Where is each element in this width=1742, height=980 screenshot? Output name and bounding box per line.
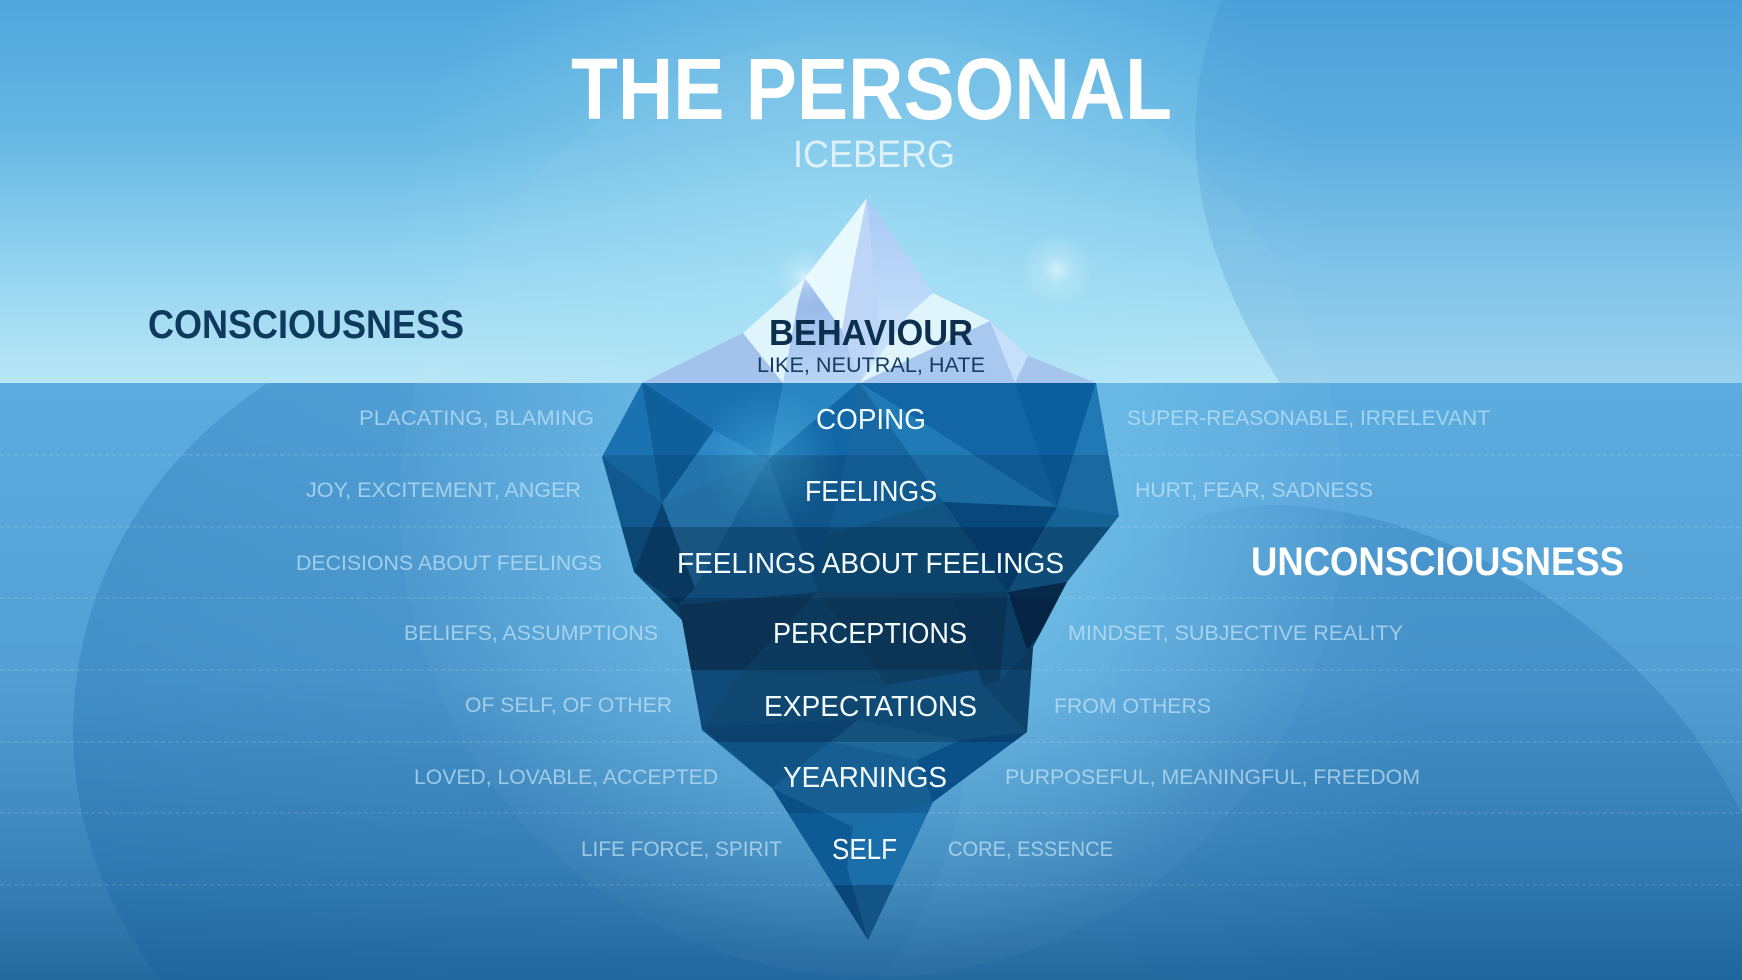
iceberg underwater facets (590, 382, 1130, 943)
background: sky glow (0, 0, 1742, 384)
right note: perceptions: MINDSET, SUBJECTIVE REALITY (1068, 621, 1403, 645)
heading: consciousness: CONSCIOUSNESS (148, 303, 464, 347)
left note: expectations: OF SELF, OF OTHER (465, 693, 672, 717)
right note: coping: SUPER-REASONABLE, IRRELEVANT (1127, 406, 1490, 430)
background: central circle (400, 33, 1344, 977)
background: water glow (0, 383, 1742, 980)
layer label: coping: COPING (816, 404, 926, 436)
iceberg depth bands (590, 455, 1130, 945)
subtitle: ICEBERG (793, 134, 955, 176)
layer label: yearnings: YEARNINGS (783, 762, 947, 794)
layer label: feelings: FEELINGS (805, 476, 937, 508)
left note: feelings about feelings: DECISIONS ABOUT FEELINGS (296, 551, 602, 575)
layer label: expectations: EXPECTATIONS (764, 691, 977, 723)
left note: coping: PLACATING, BLAMING (359, 406, 594, 430)
left note: self: LIFE FORCE, SPIRIT (581, 837, 782, 861)
iceberg tip above water (642, 198, 1096, 383)
behaviour examples: LIKE, NEUTRAL, HATE (757, 353, 985, 377)
icon: sun glow (1021, 234, 1093, 306)
right note: self: CORE, ESSENCE (948, 837, 1113, 861)
right note: expectations: FROM OTHERS (1054, 694, 1211, 718)
background: sky (0, 0, 1742, 384)
layer label: perceptions: PERCEPTIONS (773, 618, 967, 650)
right note: feelings: HURT, FEAR, SADNESS (1135, 478, 1373, 502)
title: THE PERSONAL (571, 41, 1172, 138)
heading: unconsciousness: UNCONSCIOUSNESS (1251, 540, 1624, 584)
left note: yearnings: LOVED, LOVABLE, ACCEPTED (414, 765, 718, 789)
left note: feelings: JOY, EXCITEMENT, ANGER (306, 478, 581, 502)
left note: perceptions: BELIEFS, ASSUMPTIONS (404, 621, 658, 645)
background: water (0, 383, 1742, 980)
layer label: feelings about feelings: FEELINGS ABOUT FEELINGS (677, 548, 1064, 580)
iceberg (590, 198, 1130, 945)
behaviour label: BEHAVIOUR (769, 312, 973, 353)
layer label: self: SELF (832, 834, 897, 866)
right note: yearnings: PURPOSEFUL, MEANINGFUL, FREEDOM (1005, 765, 1420, 789)
